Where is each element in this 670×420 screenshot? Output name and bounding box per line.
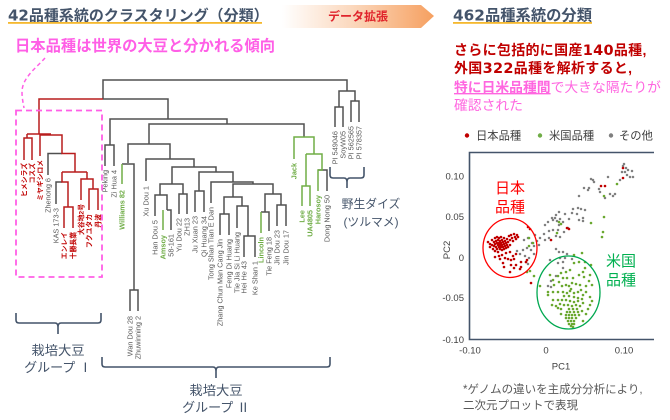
- label: Japanese varieties: 日本: [495, 180, 525, 197]
- variety labels: grey: Jin Dou 17: [282, 230, 290, 265]
- variety labels: Japanese: 丹波: [94, 214, 102, 228]
- variety labels: grey: Tie Jia Si Li Huang: [232, 232, 242, 293]
- callout: Japanese varieties separate: [15, 37, 275, 108]
- arrow: data expansion: データ拡張: [328, 8, 388, 24]
- dendrogram branches: grey: [48, 80, 359, 311]
- bracket: cultivated group I: グループ Ⅰ: [24, 360, 92, 375]
- legend: その他: [619, 130, 653, 142]
- variety labels: grey: Zhuwinning 2: [134, 316, 142, 359]
- bracket: cultivated group II: グループ Ⅱ: [182, 400, 250, 415]
- points: Japanese: [488, 168, 623, 283]
- variety labels: grey: Zhenong 6: [44, 178, 52, 213]
- axis tick labels: -0.10: [459, 346, 481, 356]
- label: US varieties: 米国: [606, 253, 636, 270]
- variety labels: grey: Qi Huang 34: [200, 216, 208, 257]
- variety labels: grey: SoyW05: [338, 131, 348, 159]
- bracket: wild soybean: (ツルマメ): [343, 215, 399, 229]
- footnote: [463, 382, 643, 412]
- variety labels: grey: ZH13: [182, 218, 192, 236]
- bracket: cultivated group II: 栽培大豆: [189, 383, 243, 398]
- variety labels: grey: Xu Dou 1: [142, 186, 150, 216]
- variety labels: Japanese: [20, 160, 102, 259]
- variety labels: grey: 58-161: [166, 234, 176, 257]
- variety labels: US: Amsoy: [158, 234, 168, 259]
- title: 42 varieties clustering: 42品種系統のクラスタリング（分類）: [8, 6, 269, 24]
- variety labels: Japanese: コスズ: [28, 163, 36, 183]
- footnote: 二次元プロットで表現: [463, 399, 578, 412]
- axis tick labels: PC2: [442, 241, 453, 259]
- variety labels: US: Williams 82: [118, 190, 126, 230]
- variety labels: US: Lincoln: [256, 237, 266, 263]
- plot frame: [470, 152, 654, 340]
- text block: analysis summary: さらに包括的に国産140品種,: [454, 42, 647, 59]
- arrow: data expansion: [282, 5, 434, 28]
- variety labels: grey: Yu Dou 22: [174, 218, 184, 252]
- bracket: wild soybean: 野生ダイズ: [342, 197, 401, 211]
- axis tick labels: PC1: [552, 362, 570, 372]
- variety labels: US: Jack: [290, 162, 298, 179]
- bracket: cultivated group I: 栽培大豆: [31, 343, 85, 358]
- variety labels: US: Harosoy: [314, 194, 322, 224]
- ellipse: US cluster: [537, 256, 600, 329]
- variety labels: grey: Tong Shan Tian E Dan: [206, 207, 216, 280]
- bracket: cultivated group II: [102, 357, 330, 415]
- label: Japanese varieties: [495, 180, 525, 216]
- label: US varieties: [606, 253, 636, 289]
- variety labels: grey: PI 562565: [346, 126, 356, 159]
- axis tick labels: 0: [459, 253, 464, 264]
- variety labels: US: Lee: [298, 210, 306, 223]
- callout: Japanese varieties separate: 日本品種は世界の大豆と分かれる傾向: [15, 37, 275, 55]
- variety labels: Japanese: ヒメシラズ: [20, 163, 28, 197]
- axis tick labels: -0.10: [442, 335, 464, 346]
- text block: analysis summary: 確認された: [454, 98, 523, 113]
- variety labels: US: UA4805: [306, 210, 314, 237]
- variety labels: grey: KAS 173-3: [52, 208, 60, 243]
- variety labels: grey: Wan Dou 28: [126, 316, 134, 356]
- ellipse: Japanese cluster: [483, 218, 537, 278]
- text block: analysis summary: 特に日米品種間で大きな隔たりが: [454, 79, 661, 95]
- variety labels: Japanese: 十勝長葉: [68, 232, 78, 259]
- variety labels: grey: Ju Xuan 23: [190, 216, 200, 253]
- points: other: [517, 164, 633, 287]
- legend: 日本品種: [476, 128, 521, 142]
- bracket: wild soybean: [330, 167, 401, 229]
- variety labels: grey: Han Dou 5: [150, 220, 160, 255]
- variety labels: grey: PI 578357: [354, 126, 364, 159]
- variety labels: grey: Ke Shan 1: [250, 261, 260, 295]
- title: 462 varieties classification: 462品種系統の分類: [453, 6, 593, 24]
- variety labels: Japanese: 大谷地2号: [76, 204, 86, 235]
- legend: 米国品種: [549, 128, 594, 142]
- variety labels: grey: Feng Di Huang: [224, 239, 234, 288]
- variety labels: US: [118, 162, 322, 263]
- variety labels: grey: Zi Hua 4: [110, 170, 118, 198]
- bracket: cultivated group I: [16, 313, 101, 375]
- label: Japanese varieties: 品種: [495, 199, 525, 216]
- variety labels: Japanese: エンレイ: [60, 232, 68, 259]
- scatter plot: [442, 152, 654, 372]
- text block: analysis summary: [454, 42, 661, 113]
- variety labels: grey: Zhang Chun Man Cang Jin: [216, 239, 224, 326]
- variety labels: Japanese: フクユタカ: [84, 214, 94, 248]
- dendrogram branches: red: [24, 99, 103, 228]
- variety labels: grey: Peking: [100, 170, 110, 192]
- variety labels: grey: Dong Nong 50: [322, 195, 332, 242]
- variety labels: grey: [44, 126, 364, 359]
- text block: analysis summary: 外国322品種を解析すると,: [454, 60, 632, 77]
- variety labels: grey: Tie Feng 18: [264, 237, 274, 276]
- legend: [465, 128, 653, 142]
- variety labels: grey: PI 549046: [330, 131, 340, 164]
- label: US varieties: 品種: [606, 272, 636, 289]
- axis tick labels: 0: [543, 346, 549, 356]
- dashed box: Japanese varieties: [16, 110, 102, 277]
- variety labels: grey: Jin Dou 23: [272, 230, 282, 265]
- points: US: [527, 184, 617, 327]
- dendrogram branches: green: [122, 137, 322, 233]
- axis tick labels: -0.05: [442, 293, 464, 304]
- variety labels: grey: Hei He 43: [240, 261, 248, 293]
- axis tick labels: 0.10: [615, 346, 633, 356]
- dendrogram: [20, 80, 364, 359]
- footnote: *ゲノムの違いを主成分分析により,: [463, 382, 643, 396]
- axis tick labels: [442, 172, 633, 372]
- axis tick labels: 0.10: [446, 172, 464, 182]
- axis tick labels: 0.05: [446, 212, 464, 223]
- variety labels: Japanese: ミヤギシロメ: [36, 160, 44, 201]
